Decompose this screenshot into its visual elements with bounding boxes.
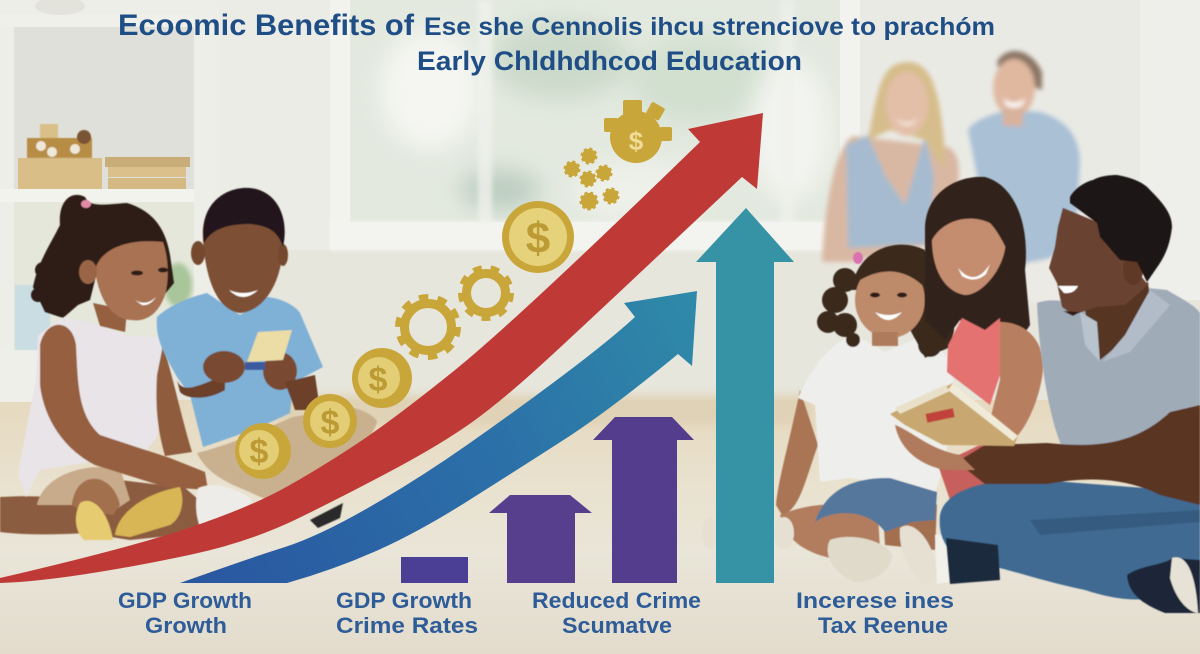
label: reduced crime: Reduced Crime [532,588,701,613]
title: Ese she Cennolis ihcu strenciove to prachóm [424,13,995,41]
bar: medium purple arrow [489,495,592,583]
label: GDP growth: Growth [145,613,227,638]
book [890,383,1018,446]
face [1049,208,1148,315]
face [95,241,168,320]
family: man [890,175,1200,613]
shorts [815,478,937,532]
label: GDP growth crime rates [336,588,478,638]
shoe [1127,558,1200,613]
card [247,330,292,362]
gear 2 [461,268,511,318]
legs [0,480,205,540]
title [118,9,995,76]
polo shirt [1037,288,1200,453]
coin 1: $ [250,433,269,471]
neck [93,303,127,332]
arm [990,322,1043,438]
label: GDP growth [118,588,252,638]
neck [1085,282,1150,360]
head [203,190,284,313]
arms and hands [177,375,225,398]
title: Ecoomic Benefits of [118,9,415,42]
label: GDP growth crime rates: Crime Rates [336,613,478,638]
money bag: $ [629,126,644,156]
shirt [798,335,955,492]
coins and gears [235,100,672,479]
label: tax revenue: Tax Reenue [818,613,948,638]
shoes [828,537,892,582]
family: teen girl [925,177,1043,500]
shorts [37,467,130,508]
family: little girl [702,245,955,585]
arms [40,325,208,490]
window [330,0,860,250]
dark socks [946,538,1000,584]
coin 2: $ [321,404,340,442]
face [932,219,1006,295]
shoes [76,501,113,540]
coin 4: $ [526,214,550,263]
label: reduced crime [532,588,701,638]
label: GDP growth crime rates: GDP Growth [336,588,472,613]
tank top [947,318,1000,405]
label: reduced crime: Scumatve [562,613,672,638]
jeans [940,480,1200,599]
label: tax revenue: Incerese ines [796,588,954,613]
shirt [157,293,323,447]
pants [197,407,377,500]
coin 2 [303,394,357,448]
background woman: blonde [822,62,959,262]
coin 3: $ [369,361,388,399]
arm [776,390,818,515]
coin 1 [235,423,291,479]
money bag [604,100,672,163]
title: Early Chldhdhcod Education [417,46,802,76]
arrow: teal vertical arrow [696,208,794,583]
hair back [925,177,1030,355]
bar: short purple bar [401,557,468,583]
lower pink [938,440,1000,500]
curly hair [33,195,174,318]
arm and hands [957,405,1200,505]
small gears cluster [565,149,618,209]
hair [1070,175,1172,282]
face [855,262,925,338]
bookshelf [0,0,220,350]
legs [780,504,880,558]
coin 4 [502,201,574,273]
bar: tall purple arrow [593,417,694,583]
label: tax revenue [796,588,954,638]
sock [196,485,252,527]
dress [18,317,165,497]
arrow: blue rising arrow [180,291,697,583]
hair [852,245,955,358]
arrow: red growth arrow [0,113,763,583]
coin 3 [352,348,412,408]
background woman: shirt [968,51,1080,302]
child: boy with blue shirt [157,188,377,528]
child: girl with curly ponytail [0,195,208,540]
gear 1 [398,298,458,356]
label: GDP growth: GDP Growth [118,588,252,613]
